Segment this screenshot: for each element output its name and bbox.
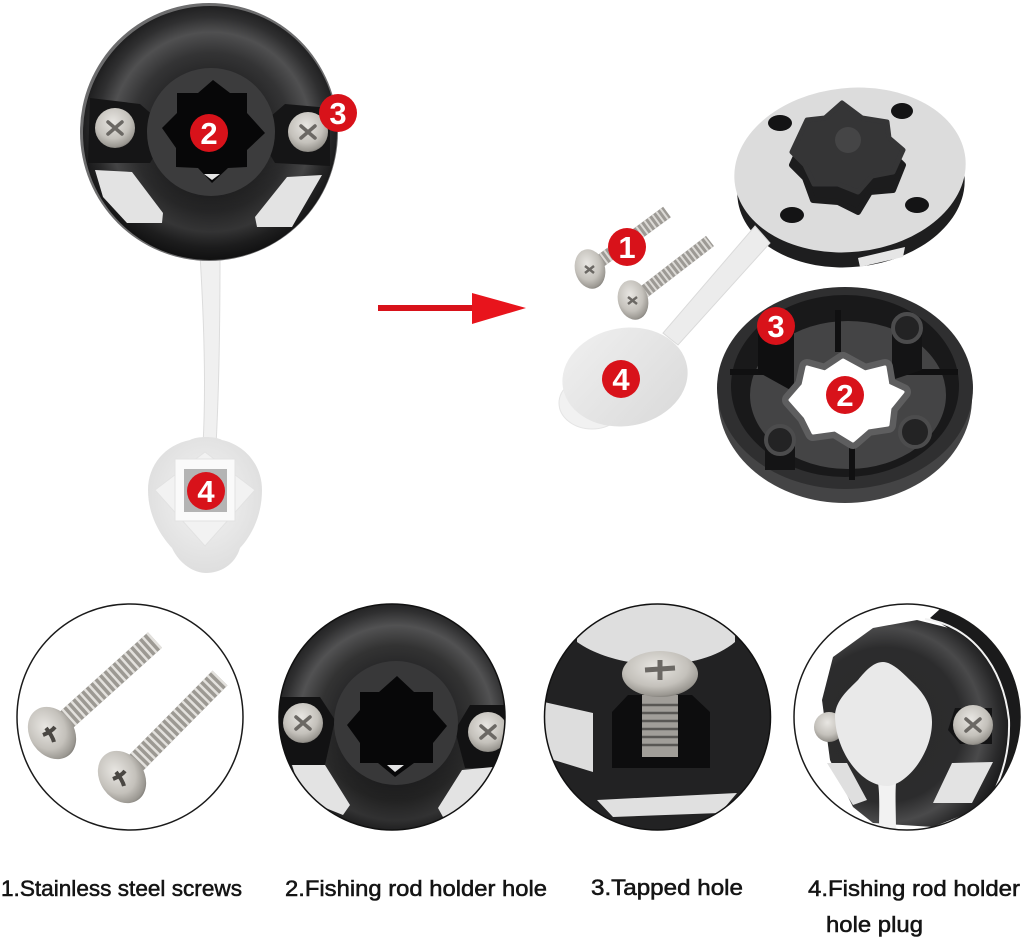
- detail circle: tapped hole: [544, 600, 770, 830]
- product: two loose screws: 1: [618, 230, 636, 265]
- product: assembled holder front view: 3: [329, 96, 347, 131]
- plate: [726, 76, 974, 264]
- outline: detail circle 3: [544, 604, 770, 830]
- product: loose plug: 4: [612, 362, 630, 397]
- knob face: [792, 103, 903, 192]
- product: exploded view top plate: [663, 76, 974, 345]
- product: exploded view base ring: 3: [767, 309, 785, 344]
- knob side: [792, 114, 903, 212]
- badge 3: [757, 307, 795, 345]
- caption 4 second line: hole plug: [826, 912, 923, 937]
- star hole: [162, 80, 265, 183]
- centre ring: [147, 68, 275, 196]
- product: exploded view base ring: 2: [836, 378, 854, 413]
- caption 1: 1.Stainless steel screws: [1, 876, 242, 901]
- product: plug on strap: [148, 437, 262, 573]
- right screw: [288, 112, 328, 152]
- product: loose plug: [554, 318, 696, 436]
- product: exploded view base ring: [717, 287, 973, 503]
- white pad on side: [858, 247, 905, 267]
- product: plug on strap: 4: [197, 474, 215, 509]
- side screw slots: [88, 98, 170, 163]
- caption 3: 3.Tapped hole: [591, 875, 743, 900]
- badge 1: [608, 228, 646, 266]
- detail circle: rod holder hole: [279, 604, 508, 830]
- star opening: [790, 360, 903, 441]
- white inserts: [95, 170, 163, 223]
- star opening rim: [790, 360, 903, 441]
- product: two loose screws: [570, 212, 710, 323]
- detail circle: rod holder hole plug: [794, 600, 1024, 830]
- badge 2: [190, 114, 228, 152]
- left screw: [95, 108, 135, 148]
- product: assembled holder front view: 2: [200, 116, 218, 151]
- badge 3: [319, 94, 357, 132]
- strap: [663, 226, 770, 345]
- badge 4: [187, 472, 225, 510]
- caption 2: 2.Fishing rod holder hole: [285, 876, 547, 901]
- outline: detail circle 2: [279, 604, 505, 830]
- caption 4: 4.Fishing rod holder: [808, 876, 1020, 901]
- product: assembled holder front view: [80, 3, 357, 445]
- arrow: red arrow pointing right: [378, 293, 526, 324]
- screw posts: [758, 330, 794, 392]
- holder body: [80, 3, 338, 261]
- detail circle: stainless steel screws: [17, 604, 243, 830]
- badge 2: [826, 376, 864, 414]
- badge 4: [602, 360, 640, 398]
- strap: [200, 255, 220, 445]
